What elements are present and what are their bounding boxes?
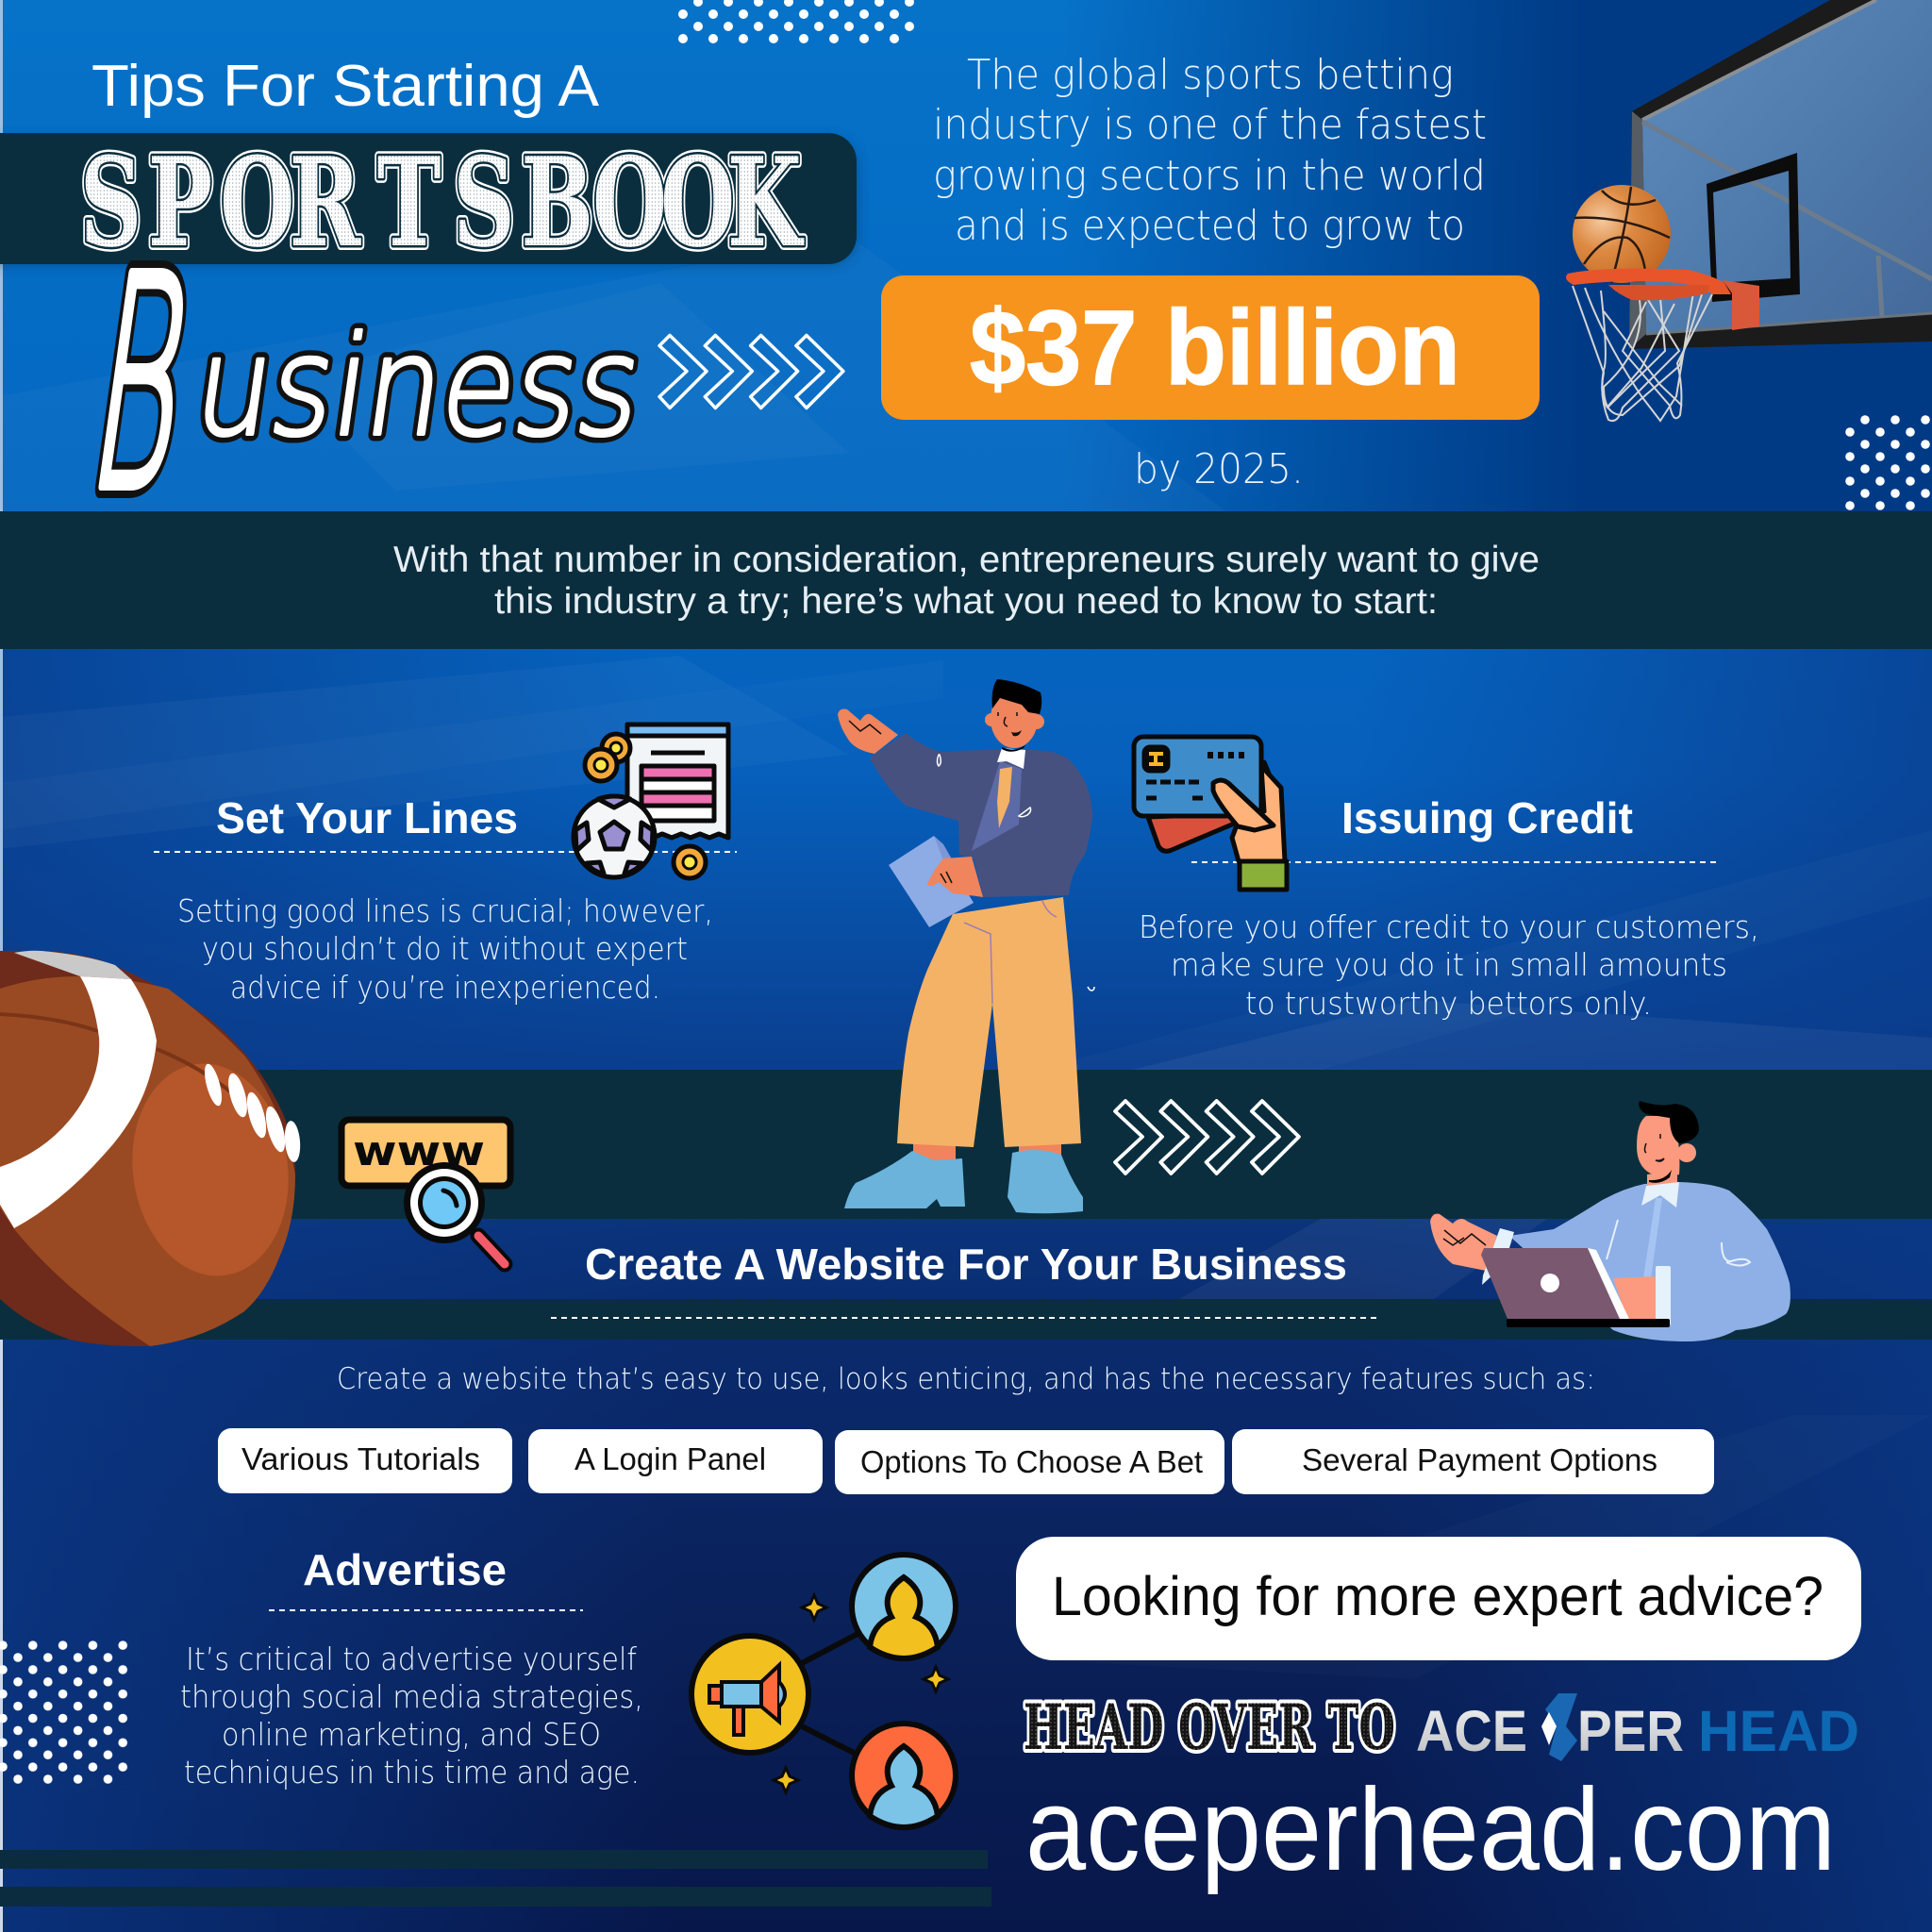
dot pattern: right	[1841, 413, 1932, 511]
callout: expert advice: Looking for more expert advice?	[1052, 1566, 1824, 1627]
logo line: head over to ace per head: ACE	[1416, 1699, 1527, 1763]
decorative bands	[0, 511, 1932, 1907]
body: issuing credit: to trustworthy bettors only.	[1245, 985, 1652, 1022]
intro band text: With that number in consideration, entrepreneurs surely want to give	[393, 540, 1540, 580]
arrows: band chevrons	[1115, 1101, 1299, 1174]
pill: options to choose a bet	[835, 1430, 1224, 1494]
body: set your lines: you shouldn’t do it without expert	[202, 930, 688, 967]
icon: www search	[341, 1120, 510, 1264]
by 2025: by 2025.	[1134, 445, 1304, 493]
body: advertise: online marketing, and SEO	[222, 1716, 601, 1753]
panel: create a website	[218, 1240, 1714, 1494]
panel: issuing credit	[1134, 737, 1759, 1022]
body: issuing credit: Before you offer credit to your customers,	[1139, 908, 1759, 945]
illustration: man with laptop	[1430, 1101, 1790, 1341]
pill: login panel	[528, 1429, 823, 1493]
dot pattern: bottom left	[0, 1640, 132, 1787]
body: issuing credit: make sure you do it in small amounts	[1171, 946, 1727, 983]
heading: issuing credit: Issuing Credit	[1341, 793, 1633, 842]
illustration: football	[0, 951, 302, 1346]
title script: Business: usiness	[186, 308, 651, 467]
body: advertise: techniques in this time and age.	[184, 1754, 640, 1790]
panel: advertise	[180, 1545, 643, 1790]
arrows: header chevrons	[659, 336, 843, 408]
logo line: head over to ace per head: PER	[1577, 1699, 1684, 1763]
illustration: basketball hoop	[1566, 0, 1932, 421]
title script: Business: B	[75, 214, 208, 555]
logo line: head over to ace per head: HEAD OVER TO	[1024, 1690, 1395, 1764]
intro text block	[933, 51, 1487, 250]
title banner: Sportsbook: SPORTSBOOK	[80, 132, 805, 275]
title script: Business: usiness	[186, 308, 651, 467]
callout: $37 billion: $37 billion	[970, 289, 1460, 407]
pill: options to choose a bet: Options To Choose A Bet	[860, 1444, 1203, 1479]
title script: Business: B	[75, 214, 208, 555]
body: issuing credit	[1139, 908, 1759, 1022]
heading: set your lines: Set Your Lines	[216, 793, 518, 842]
pill: various tutorials	[218, 1428, 512, 1493]
title banner: Sportsbook: SPORTSBOOK	[80, 132, 805, 275]
illustration: presenter man	[838, 679, 1094, 1213]
title script: Business	[75, 214, 651, 555]
body: set your lines: advice if you’re inexperienced.	[230, 969, 660, 1006]
pill: payment options	[1232, 1429, 1714, 1494]
icon: credit cards in hand	[1134, 737, 1287, 890]
title line: Tips For Starting A: Tips For Starting A	[92, 54, 600, 119]
body: advertise: It’s critical to advertise yourself	[186, 1641, 637, 1677]
intro text block: industry is one of the fastest	[933, 101, 1487, 149]
body: advertise: through social media strategies,	[180, 1678, 643, 1715]
pill: payment options: Several Payment Options	[1302, 1442, 1657, 1477]
pill: login panel: A Login Panel	[575, 1441, 766, 1476]
intro band text	[393, 540, 1540, 622]
logo line: head over to ace per head: HEAD	[1698, 1699, 1859, 1763]
intro text block: and is expected to grow to	[955, 202, 1465, 250]
icon: betting slip and soccer ball	[574, 724, 728, 878]
heading: create a website: Create A Website For Your Business	[585, 1240, 1347, 1289]
heading: advertise: Advertise	[303, 1545, 507, 1594]
intro text block: The global sports betting	[967, 51, 1454, 99]
website url: aceperhead.com	[1025, 1765, 1836, 1895]
pill: various tutorials: Various Tutorials	[242, 1441, 480, 1476]
logo line: head over to ace per head	[1024, 1690, 1859, 1764]
icon: www search: www	[353, 1127, 485, 1175]
body: advertise	[180, 1641, 643, 1790]
title banner: Sportsbook: SPORTSBOOK	[80, 132, 805, 275]
intro band text: this industry a try; here’s what you need to know to start:	[494, 581, 1438, 622]
callout: $37 billion	[881, 275, 1540, 420]
callout: expert advice	[1016, 1537, 1861, 1660]
dot pattern: top	[675, 0, 919, 44]
icon: social network megaphone	[691, 1555, 956, 1827]
body: create a website: Create a website that’s easy to use, looks enticing, and has the necessary features such as:	[337, 1362, 1595, 1396]
body: set your lines: Setting good lines is crucial; however,	[177, 892, 713, 929]
logo line: head over to ace per head: HEAD OVER TO	[1024, 1690, 1395, 1764]
intro text block: growing sectors in the world	[933, 152, 1486, 200]
panel: set your lines	[154, 724, 737, 1006]
body: set your lines	[177, 892, 713, 1006]
